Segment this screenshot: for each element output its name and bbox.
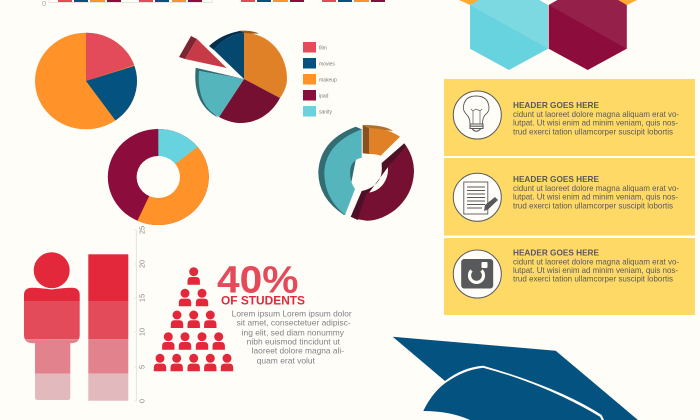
vertical axis: 15 (138, 294, 146, 302)
panel: document info (444, 158, 695, 236)
body text: lutpat. Ut wisi enim ad minim veniam, quis nos- (513, 265, 678, 275)
pie chart: flat (35, 32, 137, 130)
body text (513, 256, 679, 284)
donut chart: exploded 3D (318, 125, 414, 221)
donut chart: flat (108, 129, 209, 225)
vertical axis: 5 (138, 365, 146, 369)
people pyramid (154, 267, 233, 371)
heading: HEADER GOES HERE (513, 247, 599, 257)
vertical axis: 10 (138, 328, 146, 336)
legend: makeup (319, 78, 337, 84)
body text: cidunt ut laoreet dolore magna aliquam erat vo- (513, 183, 679, 193)
graduation cap (393, 337, 638, 420)
panel: camera info (444, 238, 695, 315)
legend: ipad (319, 94, 329, 100)
body text (513, 109, 679, 136)
body text: trud exerci tation ullamcorper suscipit lobortis (513, 126, 673, 136)
body text: lutpat. Ut wisi enim ad minim veniam, quis nos- (513, 192, 678, 202)
paragraph (232, 309, 352, 365)
legend: film (319, 46, 327, 52)
heading: HEADER GOES HERE (513, 100, 599, 110)
vertical axis: 20 (138, 260, 146, 268)
body text: cidunt ut laoreet dolore magna aliquam erat vo- (513, 256, 679, 266)
legend (303, 42, 337, 116)
body text: cidunt ut laoreet dolore magna aliquam erat vo- (513, 109, 679, 119)
heading: HEADER GOES HERE (513, 174, 599, 184)
paragraph: laoreet dolore magna ali- (252, 345, 344, 355)
body text: trud exerci tation ullamcorper suscipit lobortis (513, 200, 673, 210)
panel: lightbulb info (444, 79, 695, 156)
vertical axis: 0 (138, 399, 146, 403)
stacked bar (88, 254, 128, 401)
paragraph: nibh euismod tincidunt ut (247, 336, 341, 346)
body text: trud exerci tation ullamcorper suscipit lobortis (513, 274, 673, 284)
paragraph: ing elit, sed diam nonummy (242, 327, 345, 337)
icon: document and pencil (453, 173, 501, 221)
vertical axis (134, 226, 146, 403)
pie chart: exploded 3D (179, 31, 287, 123)
hexagons (459, 0, 637, 70)
body text: lutpat. Ut wisi enim ad minim veniam, quis nos- (513, 118, 678, 128)
statistic: 40%: 40% (217, 259, 298, 301)
legend: sanity (319, 110, 333, 116)
paragraph: quam erat volut (257, 355, 316, 365)
statistic label: OF STUDENTS (221, 296, 305, 308)
body text (513, 183, 679, 210)
icon: lightbulb (453, 91, 501, 139)
person pictogram (24, 252, 80, 400)
icon: camera (453, 250, 501, 298)
vertical axis: 25 (138, 226, 146, 234)
paragraph: sit amet, consectetuer adipisc- (237, 318, 351, 328)
paragraph: Lorem ipsum Lorem ipsum dolor (232, 309, 352, 319)
legend: movies (319, 62, 335, 68)
